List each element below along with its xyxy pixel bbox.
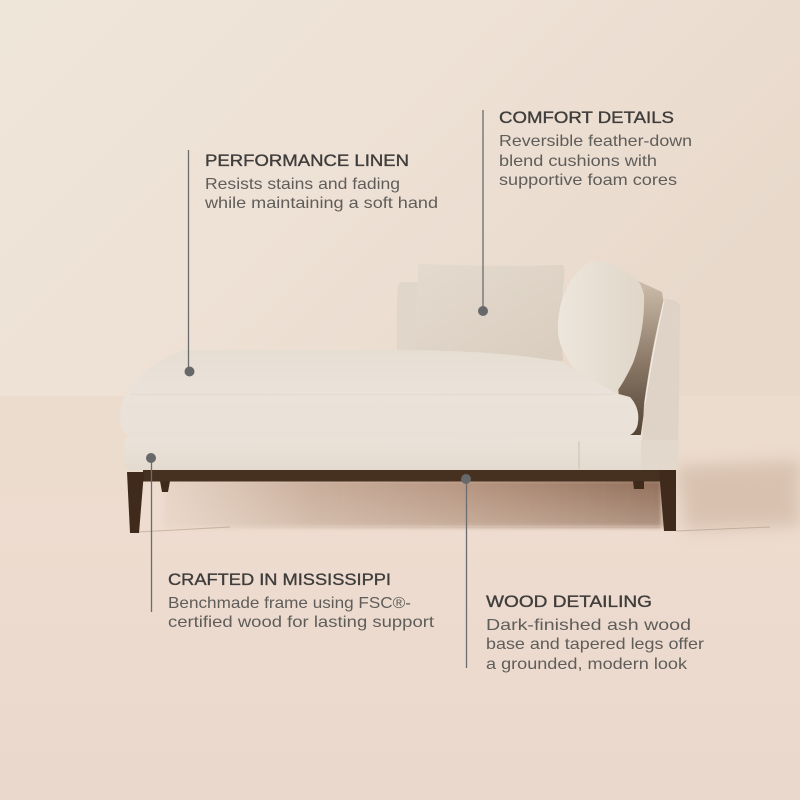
callout: crafted in mississippi: certified wood for lasting support — [168, 614, 435, 631]
callout: comfort details: COMFORT DETAILS — [499, 108, 674, 127]
back legs — [160, 481, 644, 492]
back left arm — [397, 282, 418, 352]
round pillow — [558, 261, 644, 393]
callout lines and dots — [146, 110, 488, 668]
callout: crafted in mississippi — [168, 570, 435, 631]
background floor — [0, 396, 800, 800]
callout: crafted in mississippi: CRAFTED IN MISSISSIPPI — [168, 570, 391, 589]
wooden base rail — [143, 470, 661, 482]
callout: comfort details: supportive foam cores — [499, 172, 677, 189]
right arm — [641, 299, 680, 469]
callout: performance linen — [204, 151, 438, 212]
seam gap under cushion — [140, 437, 638, 439]
callout: comfort details: blend cushions with — [499, 153, 657, 170]
callout: wood detailing — [486, 592, 705, 673]
callout: crafted in mississippi: Benchmade frame using FSC®- — [168, 595, 411, 612]
front right leg — [659, 470, 676, 531]
callout: wood detailing: base and tapered legs offer — [486, 636, 705, 653]
front left leg — [127, 472, 144, 533]
callout: comfort details — [499, 108, 692, 189]
seat cushion — [120, 350, 638, 439]
chaise sofa — [120, 261, 680, 533]
callout: performance linen: PERFORMANCE LINEN — [205, 151, 409, 170]
right back interior — [618, 280, 664, 440]
callout: wood detailing: WOOD DETAILING — [486, 592, 652, 611]
floor shadow under sofa — [138, 460, 800, 532]
callout: comfort details: Reversible feather-down — [499, 133, 692, 150]
background wall — [0, 0, 800, 396]
square pillow — [415, 264, 564, 361]
base upholstery — [123, 435, 642, 470]
callout: wood detailing: Dark-finished ash wood — [486, 617, 691, 634]
callout: performance linen: while maintaining a soft hand — [204, 195, 438, 212]
callout: performance linen: Resists stains and fading — [205, 176, 400, 193]
callout: wood detailing: a grounded, modern look — [486, 656, 688, 673]
